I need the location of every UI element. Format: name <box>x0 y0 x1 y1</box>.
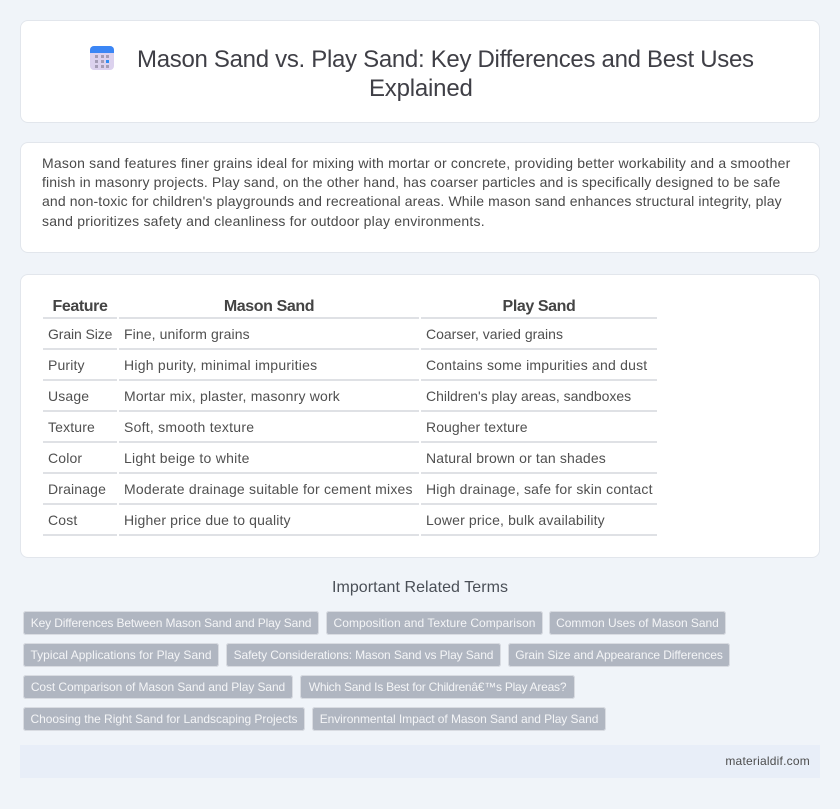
tag <box>23 675 293 699</box>
row: cost: Higher price due to quality <box>124 512 291 528</box>
tag <box>312 707 606 731</box>
row: purity: Purity <box>48 357 85 373</box>
tag <box>226 643 501 667</box>
description text <box>42 155 790 229</box>
row: color: Natural brown or tan shades <box>426 450 606 466</box>
table column headers: Mason Sand <box>224 298 314 315</box>
footer <box>20 745 820 778</box>
row: color <box>48 450 606 466</box>
title: Explained <box>369 75 473 102</box>
panel: description <box>20 142 820 253</box>
row: usage: Usage <box>48 388 89 404</box>
row: color: Color <box>48 450 82 466</box>
row: texture <box>48 419 528 435</box>
row: cost: Lower price, bulk availability <box>426 512 605 528</box>
row: drainage: High drainage, safe for skin contact <box>426 481 653 497</box>
tag: Common Uses of Mason Sand <box>556 616 719 630</box>
tag: Choosing the Right Sand for Landscaping Projects <box>31 712 297 726</box>
description text: finish in masonry projects. Play sand, on the other hand, has coarser particles and is specifically designed to be safe <box>42 174 780 190</box>
icon: calendar <box>90 46 114 70</box>
description text: sand prioritizes safety and cleanliness for outdoor play environments. <box>42 213 485 229</box>
tag <box>549 611 726 635</box>
tag <box>326 611 543 635</box>
description text: and non-toxic for children's playgrounds and recreational areas. While mason sand enhances structural integrity, play <box>42 193 782 209</box>
row: drainage: Drainage <box>48 481 106 497</box>
header card <box>20 20 820 123</box>
row: texture: Soft, smooth texture <box>124 419 254 435</box>
tag: Typical Applications for Play Sand <box>30 648 212 662</box>
row: purity: High purity, minimal impurities <box>124 357 317 373</box>
tag: Which Sand Is Best for Childrenâ€™s Play Areas? <box>309 680 566 694</box>
related term tags <box>23 611 730 731</box>
row: usage <box>48 388 631 404</box>
tag <box>508 643 730 667</box>
tag: Composition and Texture Comparison <box>334 616 535 630</box>
table column headers: Feature <box>52 298 108 315</box>
footer: materialdif.com <box>725 754 810 768</box>
row: cost <box>48 512 605 528</box>
tag: Safety Considerations: Mason Sand vs Play Sand <box>234 648 493 662</box>
row: grain size: Grain Size <box>48 326 112 342</box>
tag: Cost Comparison of Mason Sand and Play Sand <box>31 680 285 694</box>
row: texture: Rougher texture <box>426 419 528 435</box>
row: cost: Cost <box>48 512 77 528</box>
table column headers: Play Sand <box>503 298 575 315</box>
panel: comparison table <box>20 274 820 558</box>
row: grain size <box>48 326 563 342</box>
tag <box>23 643 219 667</box>
row: drainage: Moderate drainage suitable for cement mixes <box>124 481 413 497</box>
tag: Environmental Impact of Mason Sand and Play Sand <box>320 712 598 726</box>
row: texture: Texture <box>48 419 95 435</box>
row: purity <box>48 357 648 373</box>
tag: Grain Size and Appearance Differences <box>515 648 723 662</box>
tag <box>23 611 319 635</box>
title: Mason Sand vs. Play Sand: Key Differences and Best Uses <box>137 46 754 73</box>
row: usage: Mortar mix, plaster, masonry work <box>124 388 340 404</box>
row: usage: Children's play areas, sandboxes <box>426 388 631 404</box>
tag <box>23 707 305 731</box>
tag <box>300 675 575 699</box>
tag: Key Differences Between Mason Sand and Play Sand <box>31 616 311 630</box>
table column headers <box>52 298 575 315</box>
row: drainage <box>48 481 653 497</box>
row: grain size: Coarser, varied grains <box>426 326 563 342</box>
row: purity: Contains some impurities and dust <box>426 357 647 373</box>
row: grain size: Fine, uniform grains <box>124 326 250 342</box>
description text: Mason sand features finer grains ideal for mixing with mortar or concrete, providing better workability and a smoother <box>42 155 790 171</box>
title <box>137 46 754 102</box>
heading: related terms: Important Related Terms <box>332 579 508 596</box>
row: color: Light beige to white <box>124 450 250 466</box>
